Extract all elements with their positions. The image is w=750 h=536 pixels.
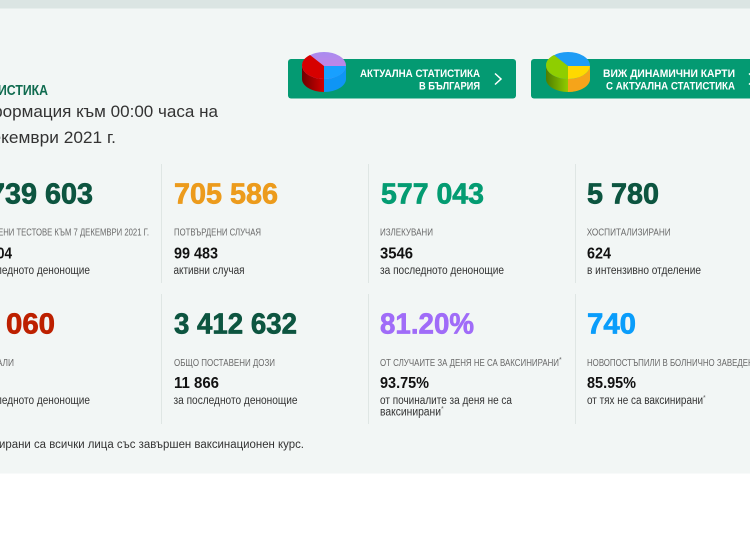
icon: chevron clipped (749, 74, 750, 84)
card: recovered (380, 178, 504, 277)
card: new hospital admissions: от тях не са ваксинирани (587, 395, 703, 407)
card: unvaccinated share: * (559, 357, 562, 364)
card: hospitalized: ХОСПИТАЛИЗИРАНИ (587, 227, 671, 238)
card: hospitalized (587, 178, 701, 277)
button: dynamic maps (531, 52, 750, 98)
card: new hospital admissions (587, 308, 750, 407)
card: recovered: 577 043 (381, 178, 484, 210)
card: deaths (0, 308, 90, 407)
top band (0, 0, 750, 8)
card: new hospital admissions: 740 (587, 308, 636, 340)
icon: pie chart red purple blue (302, 52, 346, 92)
card: confirmed cases (174, 178, 278, 277)
card: recovered: 3546 (380, 245, 413, 262)
card: total doses: за последното денонощие (174, 395, 298, 407)
card: unvaccinated share (380, 308, 562, 418)
card: recovered: за последното денонощие (380, 265, 504, 277)
icon: pie chart green blue yellow (546, 52, 590, 92)
card: unvaccinated share: 81.20% (380, 308, 474, 340)
card: confirmed cases: ПОТВЪРДЕНИ СЛУЧАЯ (174, 227, 261, 238)
card: confirmed cases: 705 586 (174, 178, 278, 210)
card: new hospital admissions: 85.95% (587, 375, 636, 392)
card: total doses: ОБЩО ПОСТАВЕНИ ДОЗИ (174, 358, 275, 369)
button: statistics in Bulgaria (288, 52, 516, 98)
card: unvaccinated share: ОТ СЛУЧАИТЕ ЗА ДЕНЯ НЕ СА ВАКСИНИРАНИ (380, 358, 559, 369)
card: unvaccinated share: ваксинирани (380, 406, 441, 418)
card: total doses (174, 308, 298, 407)
card: deaths: 060 (6, 308, 55, 340)
card: tests (0, 178, 149, 277)
card: new hospital admissions: * (703, 395, 706, 402)
card: confirmed cases: 99 483 (174, 245, 218, 262)
card: hospitalized: 5 780 (587, 178, 659, 210)
button: statistics in Bulgaria: В БЪЛГАРИЯ (419, 80, 480, 92)
card: unvaccinated share: от починалите за деня не са (380, 395, 513, 407)
button: dynamic maps: С АКТУАЛНА СТАТИСТИКА (606, 80, 735, 92)
button: dynamic maps: ВИЖ ДИНАМИЧНИ КАРТИ (603, 68, 735, 80)
card: confirmed cases: активни случая (174, 265, 244, 277)
intro text (0, 103, 219, 147)
icon: chevron (495, 74, 501, 84)
button: statistics in Bulgaria: АКТУАЛНА СТАТИСТИКА (360, 68, 480, 80)
card: hospitalized: в интензивно отделение (587, 265, 701, 277)
card: unvaccinated share: * (441, 406, 444, 413)
card: unvaccinated share: 93.75% (380, 375, 429, 392)
card: recovered: ИЗЛЕКУВАНИ (380, 227, 433, 238)
card: total doses: 3 412 632 (174, 308, 297, 340)
card: hospitalized: 624 (587, 245, 611, 262)
footnote: ирани са всички лица със завършен ваксинационен курс. (0, 439, 304, 451)
card: total doses: 11 866 (174, 375, 219, 392)
